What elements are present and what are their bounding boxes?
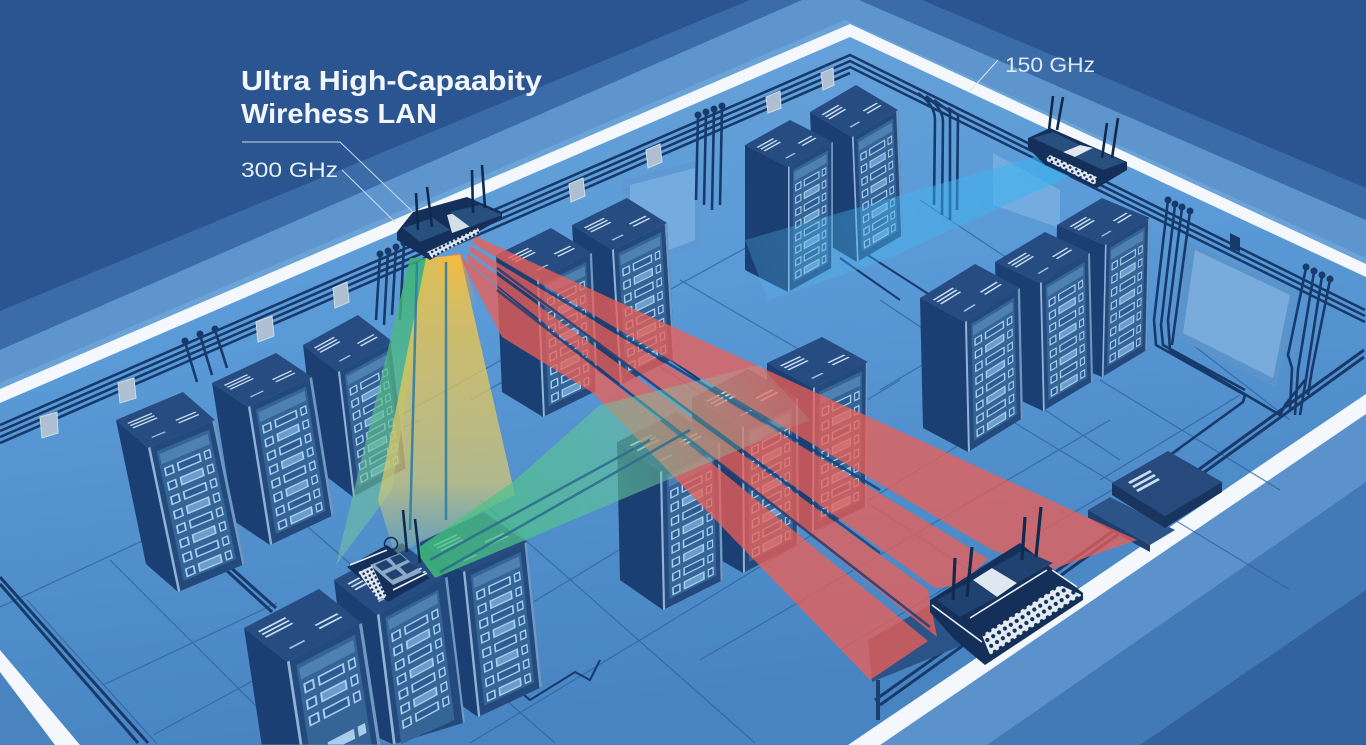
floor tile grid	[0, 200, 1290, 744]
server rack left row 3	[303, 315, 408, 497]
server rack right group 8	[920, 264, 1023, 452]
server rack foreground 16	[420, 512, 542, 717]
cable connector heads	[182, 102, 1334, 344]
server rack left row 2	[212, 353, 334, 545]
router: bottom right receiver	[930, 507, 1083, 665]
cables seen through beams	[410, 262, 690, 572]
server rack center back 4	[496, 228, 598, 417]
server rack foreground 14	[244, 589, 380, 744]
beam: blue 150 GHz	[745, 152, 1072, 300]
leader line: 150 GHz	[970, 60, 998, 91]
floor and lower wall cables	[0, 250, 1364, 743]
beam: red 300 GHz	[458, 236, 1137, 680]
leader line: 300 GHz lower	[342, 170, 395, 222]
server rack back right 7	[810, 85, 903, 262]
router: center lower relay	[347, 510, 430, 602]
label: 300 GHz: 300 GHz	[241, 159, 338, 182]
router: 150 GHz access point	[1028, 96, 1127, 188]
cable junction boxes	[40, 68, 834, 438]
cable drops on the walls	[185, 93, 1330, 455]
server rack foreground 15	[334, 543, 465, 744]
title	[241, 65, 542, 129]
router: 300 GHz access point	[397, 165, 502, 260]
cable trunk along back walls	[0, 55, 1365, 443]
title: Ultra High-Capaabity	[241, 65, 542, 96]
server rack center 11	[617, 412, 723, 610]
wall panel: back wall left	[622, 160, 700, 275]
server rack center 12	[692, 369, 799, 573]
title: Wirehess LAN	[241, 98, 437, 129]
partially hidden rack tinted by beam	[868, 605, 975, 720]
server rack center back 5	[572, 198, 675, 385]
beam: green from lower router	[415, 365, 810, 578]
lower left outer band	[0, 660, 70, 745]
server rack back right 6	[745, 120, 833, 292]
network equipment bottom right	[1088, 451, 1222, 552]
beam: yellow	[378, 255, 515, 555]
lower right outer bands	[855, 394, 1366, 745]
wall panel: back wall right	[993, 153, 1060, 228]
server rack right group 10	[1054, 198, 1150, 377]
server rack left row 1	[116, 392, 245, 592]
label: 150 GHz: 150 GHz	[1005, 54, 1095, 77]
leader line: 300 GHz upper	[242, 142, 413, 212]
server rack center 13	[766, 337, 868, 532]
beam: left green	[336, 258, 428, 565]
wall panel: right wall	[1172, 240, 1297, 388]
beam: orange	[438, 253, 480, 310]
server rack right group 9	[995, 232, 1093, 411]
